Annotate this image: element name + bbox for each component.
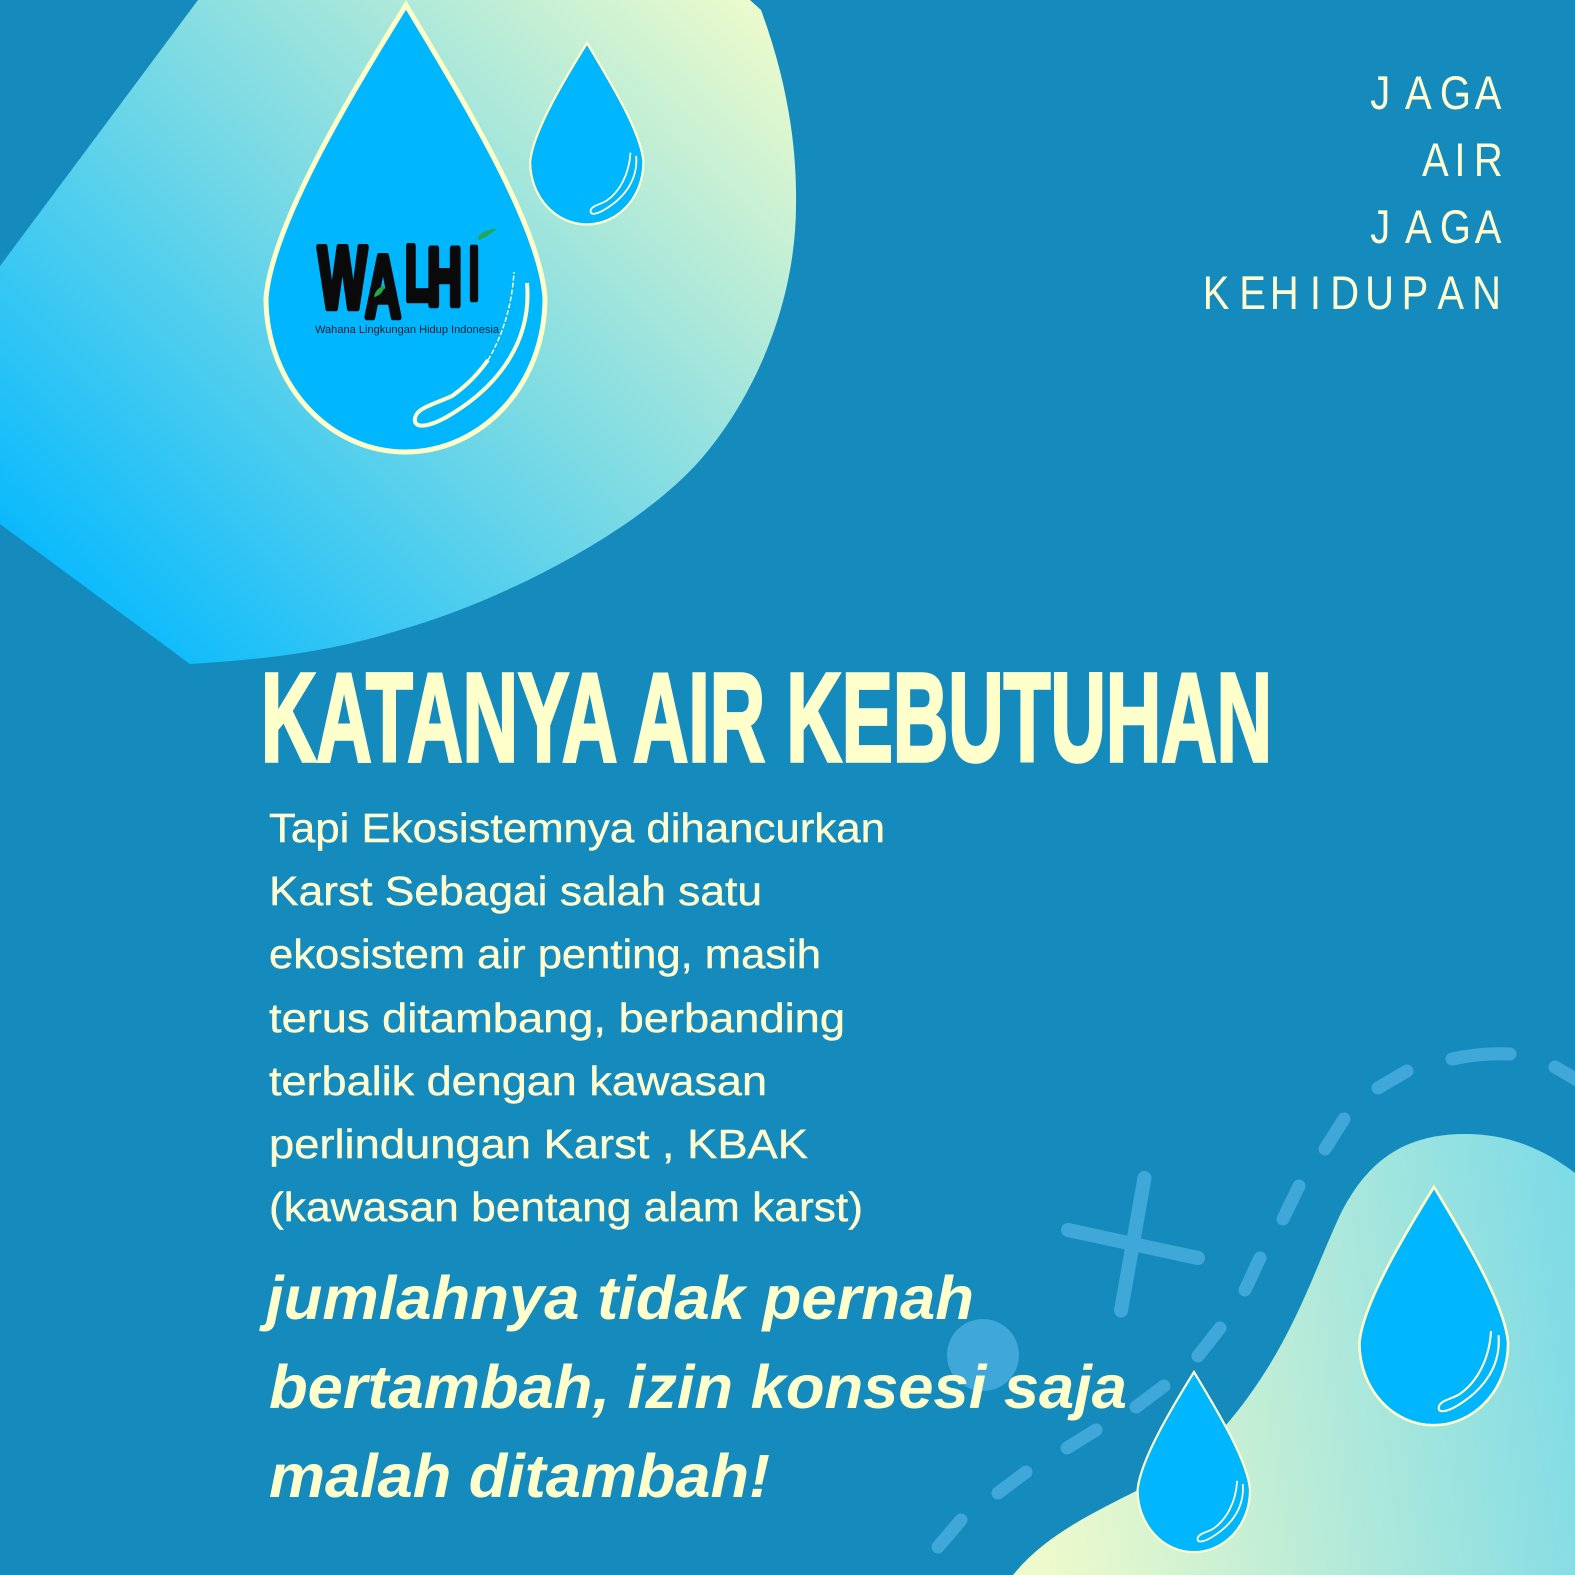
top-left gradient blob [0,0,796,664]
icon: large water drop with WALHI logo [266,5,545,452]
emphasis text: jumlahnya tidak pernah [259,1264,974,1332]
WALHI logo [315,228,500,336]
decorative circle [947,1319,1019,1391]
decorative cross [1068,1178,1198,1310]
body text: terus ditambang, berbanding [269,995,845,1041]
body text: (kawasan bentang alam karst) [269,1184,863,1230]
logo wordmark: H [427,232,462,323]
emphasis text [259,1264,1127,1510]
logo leaf top [478,228,498,240]
bottom-right gradient blob [1013,1134,1575,1575]
emphasis text: bertambah, izin konsesi saja [269,1353,1127,1421]
emphasis text: malah ditambah! [269,1442,770,1510]
logo wordmark [318,228,479,336]
logo wordmark: A [365,237,401,336]
tagline: jaga air jaga kehidupan: AIR [1422,135,1503,187]
icon: water drop bottom centre [1138,1372,1250,1552]
body text: perlindungan Karst , KBAK [269,1121,808,1167]
WALHI logo: I [469,232,479,315]
body text: Tapi Ekosistemnya dihancurkan [269,805,885,851]
logo wordmark: L [405,229,431,317]
tagline: jaga air jaga kehidupan: JAGA [1370,68,1501,120]
tagline: jaga air jaga kehidupan [1203,68,1503,320]
tagline: jaga air jaga kehidupan: KEHIDUPAN [1203,268,1501,320]
icon: small water drop top [530,43,643,224]
drop outline [266,5,545,452]
logo leaf middle [374,285,385,297]
tagline: jaga air jaga kehidupan: JAGA [1370,202,1501,254]
drop highlight [415,272,528,426]
body text [269,805,885,1230]
body text: ekosistem air penting, masih [269,931,821,977]
body text: Karst Sebagai salah satu [269,868,762,914]
logo wordmark: W [318,228,367,327]
icon: water drop bottom right [1359,1187,1508,1425]
decorative dashed path [938,1054,1575,1547]
logo tagline: Wahana Lingkungan Hidup Indonesia [315,324,500,336]
body text: terbalik dengan kawasan [269,1058,767,1104]
